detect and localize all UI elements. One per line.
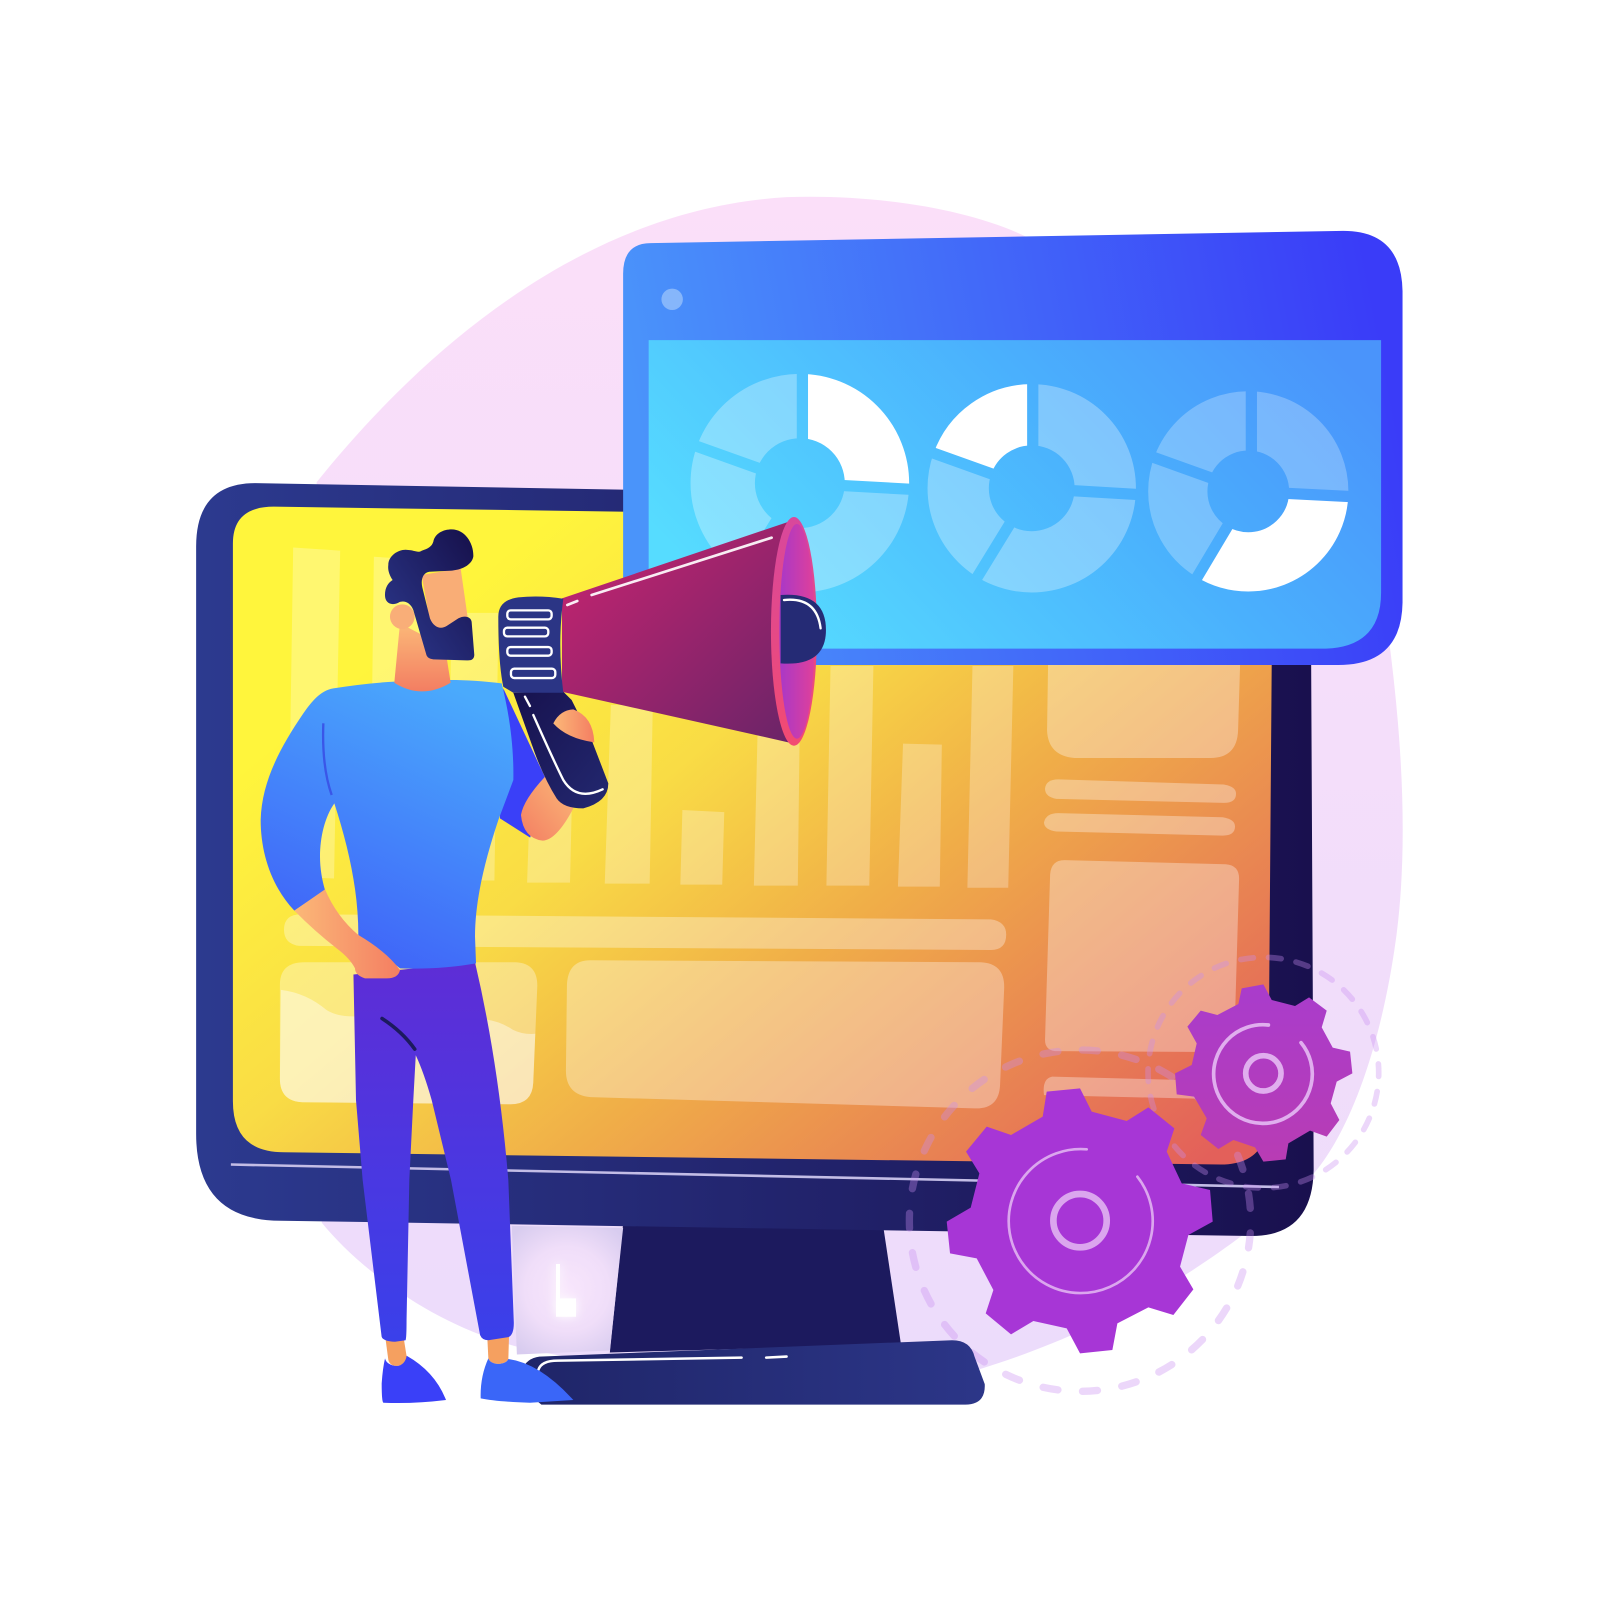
right card <box>1045 860 1239 1052</box>
monitor screen <box>233 507 1273 1165</box>
bottom highlight line <box>231 1165 1279 1187</box>
right ankle <box>487 1336 509 1364</box>
megaphone <box>498 517 826 808</box>
bell rim <box>771 517 817 746</box>
monitor base <box>523 1340 985 1405</box>
left ankle <box>386 1340 407 1366</box>
small gear <box>1175 984 1352 1162</box>
shirt fold <box>323 723 332 795</box>
lower hand <box>521 777 573 841</box>
forearm and hand on hip <box>294 889 400 978</box>
small line <box>1044 1077 1216 1099</box>
left shoe <box>382 1356 446 1403</box>
text line <box>1045 779 1236 803</box>
grip housing <box>498 596 563 693</box>
bottom left card <box>280 962 537 1104</box>
text line <box>1044 813 1235 836</box>
background blob <box>317 197 1403 1378</box>
wide bar <box>284 914 1006 950</box>
cone highlight <box>567 538 772 605</box>
cone <box>562 521 792 743</box>
glow with small light mark <box>512 1226 623 1355</box>
face <box>422 568 470 640</box>
donut chart 1 <box>723 406 877 560</box>
neck <box>394 623 451 691</box>
wave in bottom left card <box>280 990 535 1104</box>
person <box>261 529 573 1403</box>
ear <box>390 604 415 629</box>
right shoe <box>481 1358 573 1403</box>
grip slots <box>504 610 555 678</box>
window dot <box>661 289 683 310</box>
trouser crease <box>382 1018 415 1049</box>
fingers <box>553 709 594 742</box>
handle <box>513 692 608 808</box>
donut chart 2 <box>958 415 1105 562</box>
driver dome <box>781 595 826 664</box>
window frame and header <box>623 231 1403 665</box>
center card <box>566 960 1004 1108</box>
dome highlight <box>784 600 821 628</box>
window pane <box>649 340 1381 649</box>
hair and beard <box>385 529 474 660</box>
raised sleeve <box>500 688 547 838</box>
top right card <box>1047 664 1240 758</box>
monitor <box>196 483 1314 1236</box>
large gear <box>947 1088 1213 1353</box>
shirt <box>261 680 513 969</box>
handle highlights <box>525 697 603 794</box>
donut chart 3 <box>1178 421 1319 562</box>
monitor body <box>196 483 1314 1236</box>
feet <box>382 1336 573 1403</box>
screen cards <box>280 664 1240 1108</box>
browser window <box>623 231 1403 665</box>
dashed orbits <box>909 957 1379 1391</box>
trousers <box>353 962 514 1342</box>
monitor stand <box>610 1224 901 1352</box>
bar chart on screen <box>288 548 1013 888</box>
bell inside <box>779 524 815 739</box>
